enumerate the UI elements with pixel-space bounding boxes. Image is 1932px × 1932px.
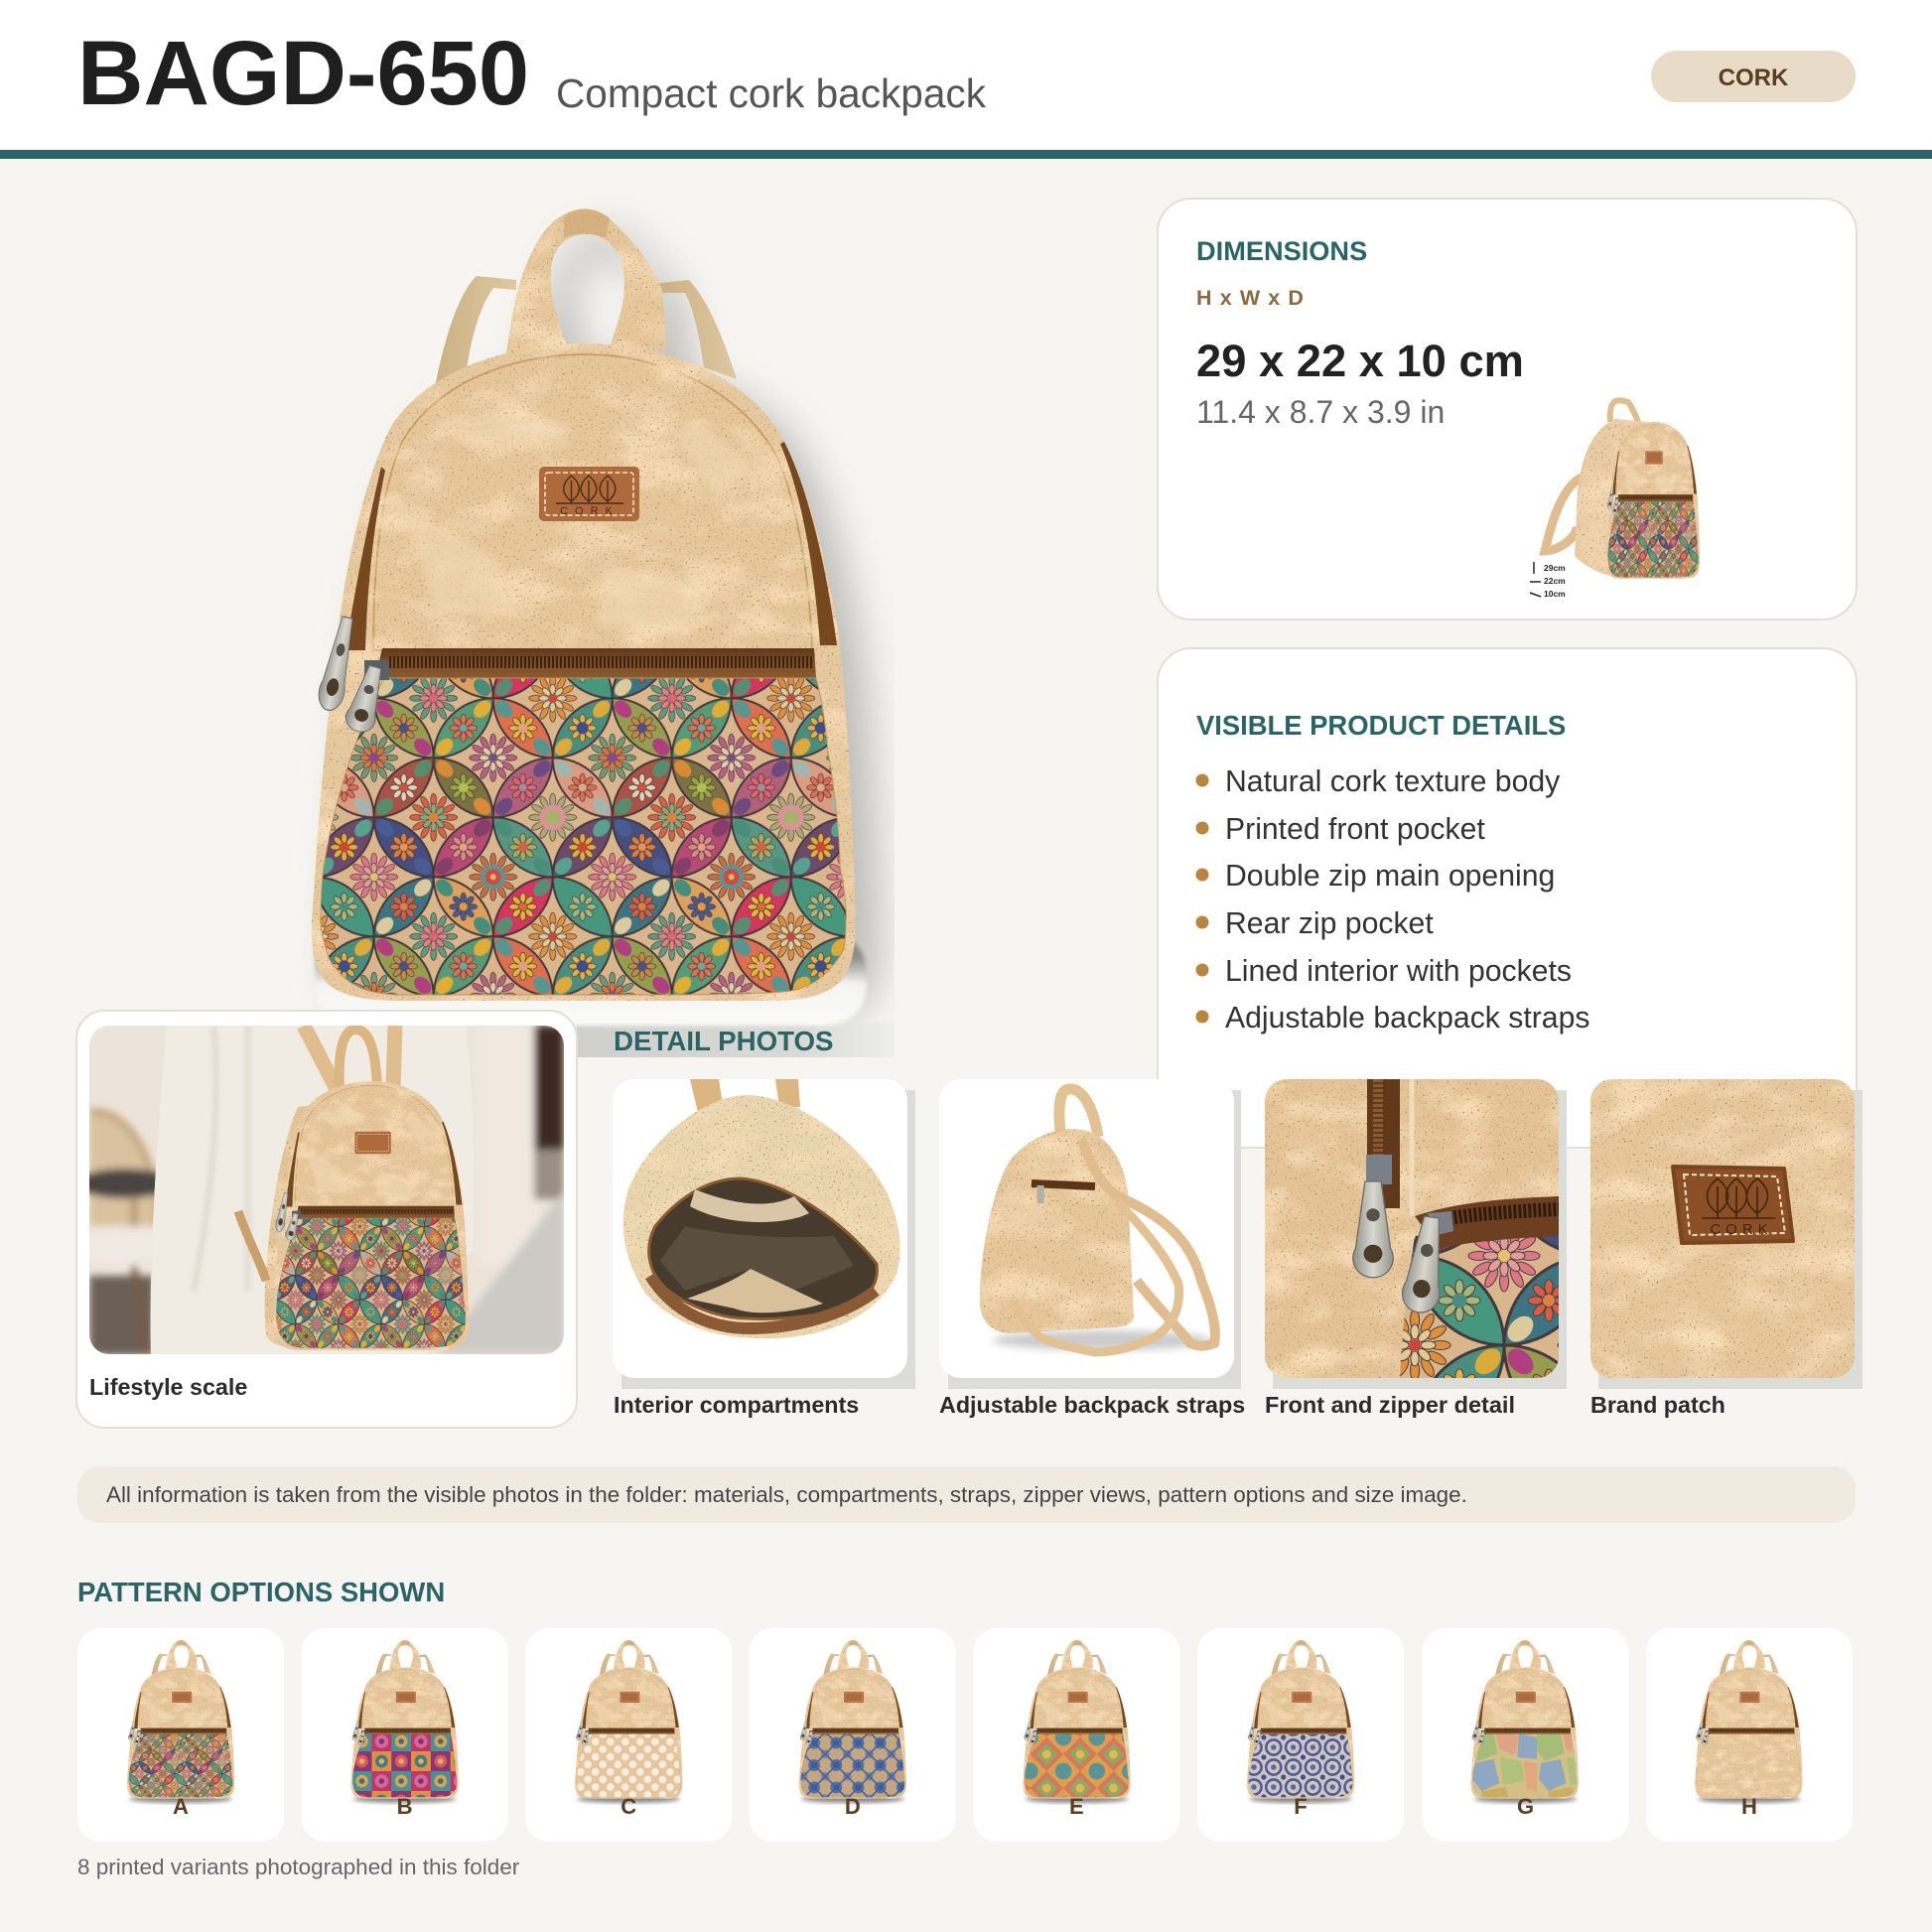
- detail card: brand patch: [1590, 1079, 1863, 1418]
- caption: Interior compartments: [614, 1392, 859, 1418]
- size reference image: 22cm: [1544, 576, 1566, 586]
- pattern card F: [1197, 1628, 1404, 1842]
- pattern card A: [77, 1628, 284, 1842]
- size in inches: 11.4 x 8.7 x 3.9 in: [1196, 394, 1445, 430]
- subtitle: Compact cork backpack: [556, 70, 987, 116]
- pattern footnote: 8 printed variants photographed in this folder: [77, 1855, 520, 1879]
- detail card: front and zipper detail: [1265, 1079, 1567, 1418]
- brand patch icon on bag: [556, 476, 623, 503]
- bullet list: Lined interior with pockets: [1225, 955, 1572, 988]
- pattern card G: G: [1517, 1794, 1534, 1819]
- size reference image: [1530, 400, 1700, 599]
- bullet list: Adjustable backpack straps: [1225, 1002, 1589, 1035]
- pattern options heading: PATTERN OPTIONS SHOWN: [77, 1577, 445, 1607]
- lifestyle caption: Lifestyle scale: [89, 1374, 247, 1400]
- pattern card C: C: [621, 1794, 636, 1819]
- pattern card E: E: [1069, 1794, 1084, 1819]
- pattern card H: H: [1741, 1794, 1757, 1819]
- detail photos heading: DETAIL PHOTOS: [614, 1026, 834, 1056]
- bullet list: Double zip main opening: [1225, 860, 1555, 893]
- bullet list: Rear zip pocket: [1225, 907, 1434, 940]
- details heading: VISIBLE PRODUCT DETAILS: [1196, 710, 1566, 741]
- pattern card D: [750, 1628, 956, 1842]
- bullet list: [1195, 765, 1589, 1035]
- size reference image: 10cm: [1544, 589, 1566, 599]
- caption: Adjustable backpack straps: [939, 1392, 1245, 1418]
- bullet list: Printed front pocket: [1225, 813, 1485, 846]
- detail card: adjustable backpack straps: [939, 1079, 1245, 1418]
- main product shadow: [316, 230, 895, 1057]
- pattern card D: D: [845, 1794, 861, 1819]
- pattern card G: [1423, 1628, 1629, 1842]
- pattern card F: F: [1294, 1794, 1308, 1819]
- panel: visible product details: [1158, 648, 1857, 1148]
- material pill: CORK: [1719, 65, 1789, 91]
- caption: Front and zipper detail: [1265, 1392, 1515, 1418]
- pattern card C: [525, 1628, 732, 1842]
- material pill: [1651, 51, 1856, 102]
- title: BAGD-650: [77, 23, 529, 124]
- pattern card H: [1646, 1628, 1853, 1842]
- lifestyle photo: [76, 1026, 564, 1355]
- source note bar: [77, 1466, 1856, 1523]
- dimensions heading: DIMENSIONS: [1196, 235, 1367, 266]
- patch wordmark on bag: CORK: [560, 505, 620, 517]
- detail card: interior compartments: [613, 1079, 915, 1418]
- size in cm: 29 x 22 x 10 cm: [1196, 336, 1524, 386]
- main product photo: printed cork backpack: [312, 208, 856, 1001]
- size reference image: 29cm: [1544, 563, 1566, 573]
- panel: dimensions: [1158, 199, 1857, 620]
- pattern card B: [302, 1628, 508, 1842]
- panel: lifestyle scale: [76, 1011, 577, 1428]
- caption: Brand patch: [1590, 1392, 1725, 1418]
- pattern card B: B: [397, 1794, 413, 1819]
- pattern card E: [973, 1628, 1179, 1842]
- header band: [0, 0, 1932, 159]
- pattern card A: A: [173, 1794, 189, 1819]
- dimension order: H x W x D: [1196, 286, 1305, 310]
- patch wordmark: CORK: [1710, 1221, 1773, 1238]
- source note bar: All information is taken from the visible photos in the folder: materials, compartments, straps, zipper views, pattern options and size image.: [106, 1482, 1467, 1507]
- bullet list: Natural cork texture body: [1225, 765, 1561, 798]
